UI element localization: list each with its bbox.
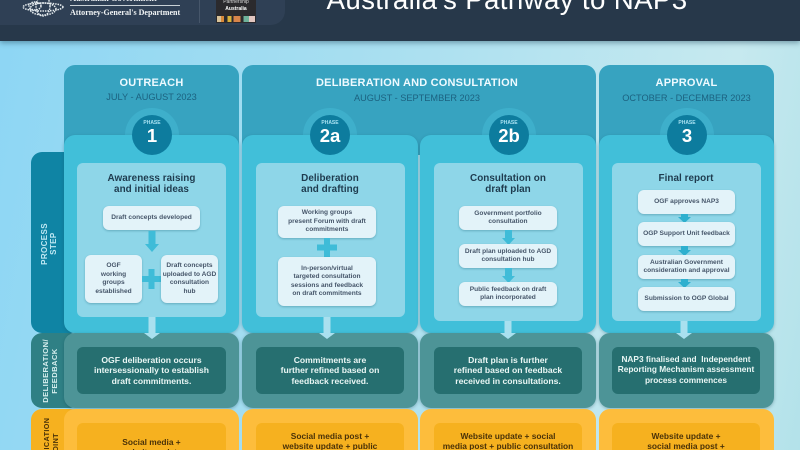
badge: phase 2a (310, 115, 350, 155)
divider (199, 0, 200, 23)
arrow: phase 3 first (678, 214, 691, 222)
box: OGF approves: OGF approves NAP3 (654, 198, 719, 205)
box: public feedback: Public feedback on draft (470, 286, 546, 292)
box: OGF working groups: groups (102, 279, 125, 286)
box: targeted sessions: targeted consultation (293, 273, 361, 280)
row label: deliberation / feedback (31, 333, 81, 408)
box: targeted sessions: on draft commitments (292, 290, 362, 297)
badge: phase 3: PHASE (678, 120, 696, 126)
feedback text 3: process commences (645, 375, 727, 385)
heading: consultation on draft plan: draft plan (485, 184, 531, 195)
box: government consideration: consideration and approval (643, 267, 730, 274)
box: public feedback (459, 282, 557, 306)
box: draft concepts uploaded (161, 255, 218, 303)
panel: communication 2b (420, 409, 596, 450)
panel: phase 1 process (64, 135, 239, 333)
feedback text 3: NAP3 finalised and Independent (621, 354, 751, 364)
box: draft concepts uploaded: uploaded to AGD (163, 270, 216, 278)
row label: process step (31, 152, 81, 333)
box: targeted sessions: sessions and feedback (291, 282, 363, 288)
feedback text 3 (612, 347, 760, 394)
communication text 2a: Social media post + (291, 431, 369, 441)
heading: outreach: OUTREACH (120, 77, 183, 89)
box: submission (638, 287, 735, 311)
arrow: phase 2b second (502, 268, 515, 282)
panel: phase 3 process (599, 135, 774, 333)
date: deliberation and consultation: AUGUST - SEPTEMBER 2023 (354, 93, 480, 103)
box: government portfolio: Government portfolio (474, 210, 542, 216)
panel: feedback 1 (64, 333, 239, 408)
arrow: phase 3 second (678, 246, 691, 255)
feedback text 2a: feedback received. (292, 376, 368, 386)
box: working groups: Working groups (302, 209, 352, 216)
panel: communication 3 (599, 409, 774, 450)
box: OGF working groups (85, 255, 142, 303)
communication text 1 (77, 423, 226, 450)
icon: plus (317, 238, 337, 257)
heading: awareness raising (108, 173, 195, 195)
box: OGF working groups: OGF (106, 262, 121, 269)
communication text 3 (612, 423, 760, 450)
header bar (0, 0, 800, 41)
communication text 2b (434, 423, 582, 450)
badge: phase 2b (489, 115, 529, 155)
arrow: phase 3 third (678, 279, 691, 287)
box: working groups: present Forum with draft (288, 218, 366, 225)
label text: FEEDBACK (50, 348, 58, 393)
box: targeted sessions: In-person/virtual (301, 264, 353, 272)
feedback text 2b: refined based on feedback (454, 365, 562, 375)
box: government portfolio: consultation (488, 218, 528, 225)
date: approval: OCTOBER - DECEMBER 2023 (622, 93, 751, 103)
feedback text 2a: further refined based on (281, 365, 379, 375)
box: OGF approves (638, 190, 735, 214)
label text: PROCESS (40, 223, 49, 264)
badge: phase 1: 1 (147, 125, 157, 146)
row label: communication point (31, 409, 81, 450)
box: support unit feedback: OGP Support Unit feedback (643, 230, 730, 237)
badge: phase 3: 3 (682, 125, 692, 146)
logo panel (0, 0, 285, 25)
box: draft concepts uploaded: Draft concepts (166, 262, 213, 269)
badge: phase 1: PHASE (143, 120, 161, 126)
box: draft plan uploaded: Draft plan uploaded to AGD (465, 248, 551, 254)
badge: phase 3 (667, 115, 707, 155)
heading: awareness raising: Awareness raising (108, 173, 195, 184)
department name: Attorney-General's Department (70, 8, 180, 17)
box: public feedback: plan incorporated (480, 294, 536, 301)
logo: Open Government Partnership Australia (216, 0, 256, 23)
heading: awareness raising: and initial ideas (114, 184, 189, 195)
panel: deliberation and consultation header (242, 65, 596, 155)
step panel 2a (256, 163, 405, 317)
logo text bold: Australia (225, 6, 247, 12)
feedback text 2a: Commitments are (294, 355, 366, 365)
box: draft concepts uploaded: hub (183, 288, 196, 294)
date: outreach: JULY - AUGUST 2023 (106, 92, 197, 102)
panel: communication 1 (64, 409, 239, 450)
feedback text 1 (77, 347, 226, 394)
arrow: phase 2b first (502, 230, 515, 244)
box: draft concepts uploaded: consultation (170, 279, 209, 286)
panel: outreach header (64, 65, 239, 155)
box: draft concepts developed: Draft concepts developed (111, 214, 192, 221)
panel: feedback 2b (420, 333, 596, 408)
panel: phase 2a process (242, 135, 418, 333)
badge halo 2b (482, 108, 536, 162)
heading: deliberation and drafting: and drafting (301, 184, 359, 195)
arrow: 3 to feedback (676, 321, 692, 339)
feedback text 2b (434, 347, 582, 394)
box: support unit feedback (638, 222, 735, 246)
box: draft plan uploaded: consultation hub (481, 256, 535, 263)
badge halo 2a (303, 108, 357, 162)
panel: phase 2b process (420, 135, 596, 333)
box: government consideration: Australian Government (650, 258, 723, 266)
arrow: 1 to feedback (144, 317, 160, 339)
heading: deliberation and consultation: DELIBERATION AND CONSULTATION (316, 77, 518, 89)
panel: feedback 3 (599, 333, 774, 408)
box: OGF working groups: working (101, 270, 126, 278)
box: government consideration (638, 255, 735, 279)
panel: approval header (599, 65, 774, 155)
label text: DELIBERATION/ (40, 339, 50, 402)
badge halo 1 (125, 108, 179, 162)
heading: consultation on draft plan: Consultation on (470, 173, 546, 184)
label text (42, 418, 60, 450)
label text: STEP (49, 232, 58, 255)
arrow: 2a to feedback (319, 317, 335, 339)
communication text 2b: Website update + social (460, 431, 556, 441)
badge: phase 1 (132, 115, 172, 155)
communication text 2a (256, 423, 404, 450)
box: working groups (278, 206, 376, 238)
icon: crest (22, 0, 64, 17)
badge: phase 2b: 2b (498, 125, 520, 146)
step panel 2b (434, 163, 583, 321)
feedback text 1: intersessionally to establish (94, 365, 209, 375)
feedback text 1: draft commitments. (112, 376, 191, 386)
heading: consultation on draft plan (470, 173, 546, 195)
feedback text 2b: Draft plan is further (468, 355, 548, 365)
step panel 1 (77, 163, 226, 317)
badge: phase 2a: PHASE (321, 120, 339, 126)
communication text 3: Website update + (652, 431, 720, 441)
rule (70, 5, 180, 6)
box: draft plan uploaded (459, 244, 557, 268)
arrow: 2b to feedback (500, 321, 516, 339)
heading: final report: Final report (659, 173, 713, 184)
panel: feedback 2a (242, 333, 418, 408)
badge: phase 2b: PHASE (500, 120, 518, 126)
box: submission: Submission to OGP Global (644, 295, 729, 302)
arrow: phase 1 down (145, 231, 159, 252)
heading: approval: APPROVAL (656, 77, 717, 89)
heading: deliberation and drafting (301, 173, 359, 195)
icon: plus (142, 269, 161, 289)
feedback text 1: OGF deliberation occurs (101, 355, 202, 365)
box: targeted sessions (278, 257, 376, 306)
heading: deliberation and drafting: Deliberation (301, 173, 359, 184)
feedback text 2a (256, 347, 404, 394)
panel: communication 2a (242, 409, 418, 450)
label text (40, 339, 58, 402)
label text (40, 223, 58, 264)
badge: phase 2a: 2a (320, 125, 340, 146)
communication text 1: Social media + (122, 437, 181, 447)
box: government portfolio (459, 206, 557, 230)
badge halo 3 (660, 108, 714, 162)
box: draft concepts developed (103, 206, 200, 230)
feedback text 2b: received in consultations. (455, 376, 561, 386)
box: OGF working groups: established (95, 288, 132, 294)
feedback text 3: Reporting Mechanism assessment (618, 364, 754, 374)
step panel 3 (612, 163, 761, 321)
logo stripes (217, 16, 255, 22)
box: working groups: commitments (306, 226, 348, 233)
